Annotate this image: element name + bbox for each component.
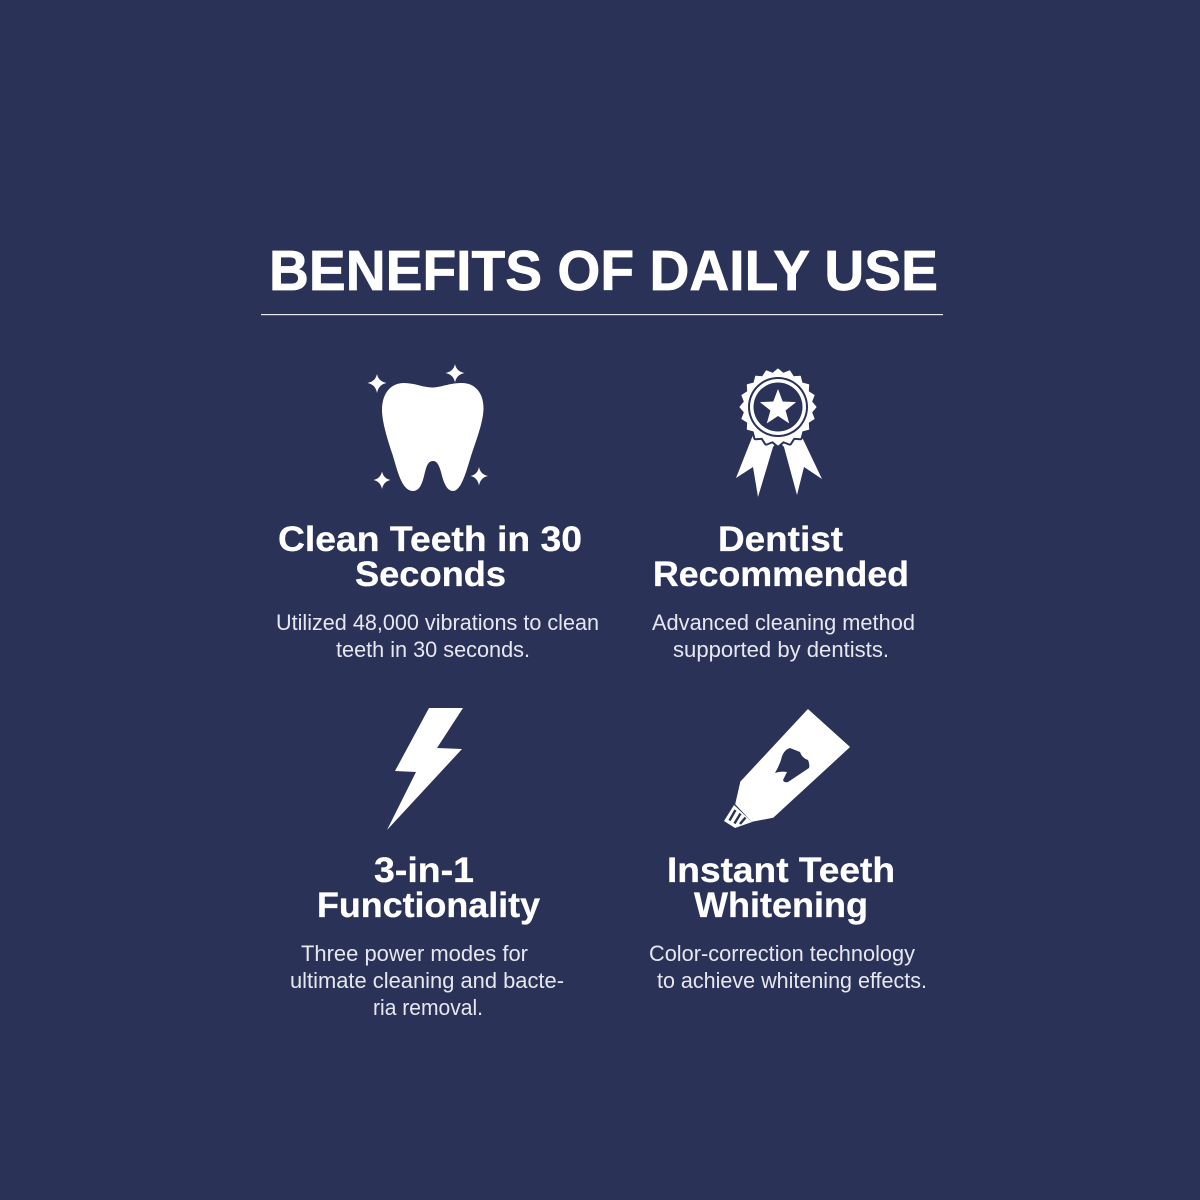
text: functionality description: ria removal. xyxy=(373,995,483,1020)
text: whitening description xyxy=(649,941,927,993)
title: BENEFITS OF DAILY USE xyxy=(269,239,938,303)
heading: clean teeth: Clean Teeth in 30 xyxy=(278,520,582,559)
heading: dentist recommended xyxy=(653,520,909,594)
text: dentist description xyxy=(652,610,915,662)
text: functionality description xyxy=(290,941,564,1020)
text: whitening description: to achieve whitening effects. xyxy=(657,968,927,993)
panel: clean teeth xyxy=(276,364,599,662)
panel: functionality xyxy=(290,708,564,1020)
panel: dentist recommended xyxy=(652,369,915,662)
heading: functionality: Functionality xyxy=(317,886,541,925)
heading: dentist recommended: Recommended xyxy=(653,555,909,594)
heading: functionality xyxy=(317,851,541,925)
text: functionality description: Three power modes for xyxy=(301,941,528,966)
heading: functionality: 3-in-1 xyxy=(374,851,474,890)
panel: whitening xyxy=(649,710,927,993)
heading: whitening xyxy=(667,851,895,925)
text: functionality description: ultimate cleaning and bacte- xyxy=(290,968,564,993)
text: dentist description: Advanced cleaning method xyxy=(652,610,915,635)
heading: whitening: Instant Teeth xyxy=(667,851,895,890)
text: dentist description: supported by dentists. xyxy=(673,637,889,662)
icon: lightning bolt xyxy=(387,708,463,830)
icon: sparkling tooth xyxy=(368,364,488,491)
heading: clean teeth: Seconds xyxy=(355,555,506,594)
icon: award ribbon xyxy=(736,369,822,497)
text: clean teeth description: Utilized 48,000 vibrations to clean xyxy=(276,610,599,635)
text: whitening description: Color-correction technology xyxy=(649,941,915,966)
text: clean teeth description: teeth in 30 seconds. xyxy=(336,637,530,662)
heading: whitening: Whitening xyxy=(694,886,868,925)
heading: clean teeth xyxy=(278,520,582,594)
heading: dentist recommended: Dentist xyxy=(718,520,843,559)
icon: toothpaste tube xyxy=(724,710,849,828)
text: clean teeth description xyxy=(276,610,599,662)
